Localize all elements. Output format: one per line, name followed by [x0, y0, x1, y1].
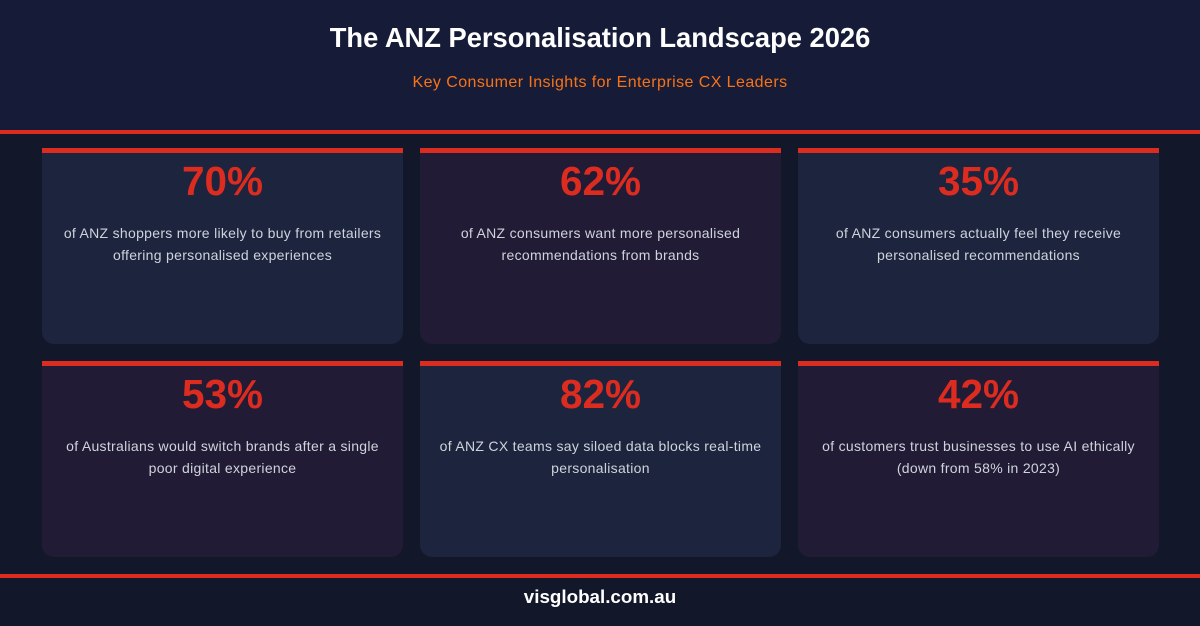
stat: 70%: 70%	[182, 158, 263, 204]
text: 62% description	[461, 225, 740, 263]
stat: 53%: 53%	[182, 371, 263, 417]
panel: 82% stat	[420, 361, 781, 557]
text: 70% description	[64, 225, 381, 263]
title: The ANZ Personalisation Landscape 2026	[330, 22, 870, 53]
text: 82% description: personalisation	[551, 460, 650, 476]
text: 53% description: of Australians would switch brands after a single	[66, 438, 379, 454]
footer text: visglobal.com.au	[524, 586, 676, 607]
text: 35% description	[836, 225, 1121, 263]
stat: 42%: 42%	[938, 371, 1019, 417]
text: 53% description: poor digital experience	[149, 460, 296, 476]
stat: 62%: 62%	[560, 158, 641, 204]
panel: 53% stat	[42, 361, 403, 557]
panel: 70% stat	[42, 148, 403, 344]
text: 42% description: (down from 58% in 2023)	[897, 460, 1060, 476]
text: 35% description: of ANZ consumers actually feel they receive	[836, 225, 1121, 241]
stat: 82%: 82%	[560, 371, 641, 417]
text: 42% description: of customers trust businesses to use AI ethically	[822, 438, 1135, 454]
text: 70% description: offering personalised experiences	[113, 247, 332, 263]
text: 82% description	[440, 438, 761, 476]
text: 62% description: recommendations from brands	[502, 247, 699, 263]
header band	[0, 0, 1200, 130]
panel: 35% stat	[798, 148, 1159, 344]
panel: 42% stat	[798, 361, 1159, 557]
text: 42% description	[822, 438, 1135, 476]
subtitle: Key Consumer Insights for Enterprise CX Leaders	[412, 74, 788, 91]
text: 82% description: of ANZ CX teams say siloed data blocks real-time	[440, 438, 761, 454]
text: 53% description	[66, 438, 379, 476]
text: 62% description: of ANZ consumers want more personalised	[461, 225, 740, 241]
panel: 62% stat	[420, 148, 781, 344]
stat: 35%: 35%	[938, 158, 1019, 204]
text: 35% description: personalised recommendations	[877, 247, 1080, 263]
text: 70% description: of ANZ shoppers more likely to buy from retailers	[64, 225, 381, 241]
